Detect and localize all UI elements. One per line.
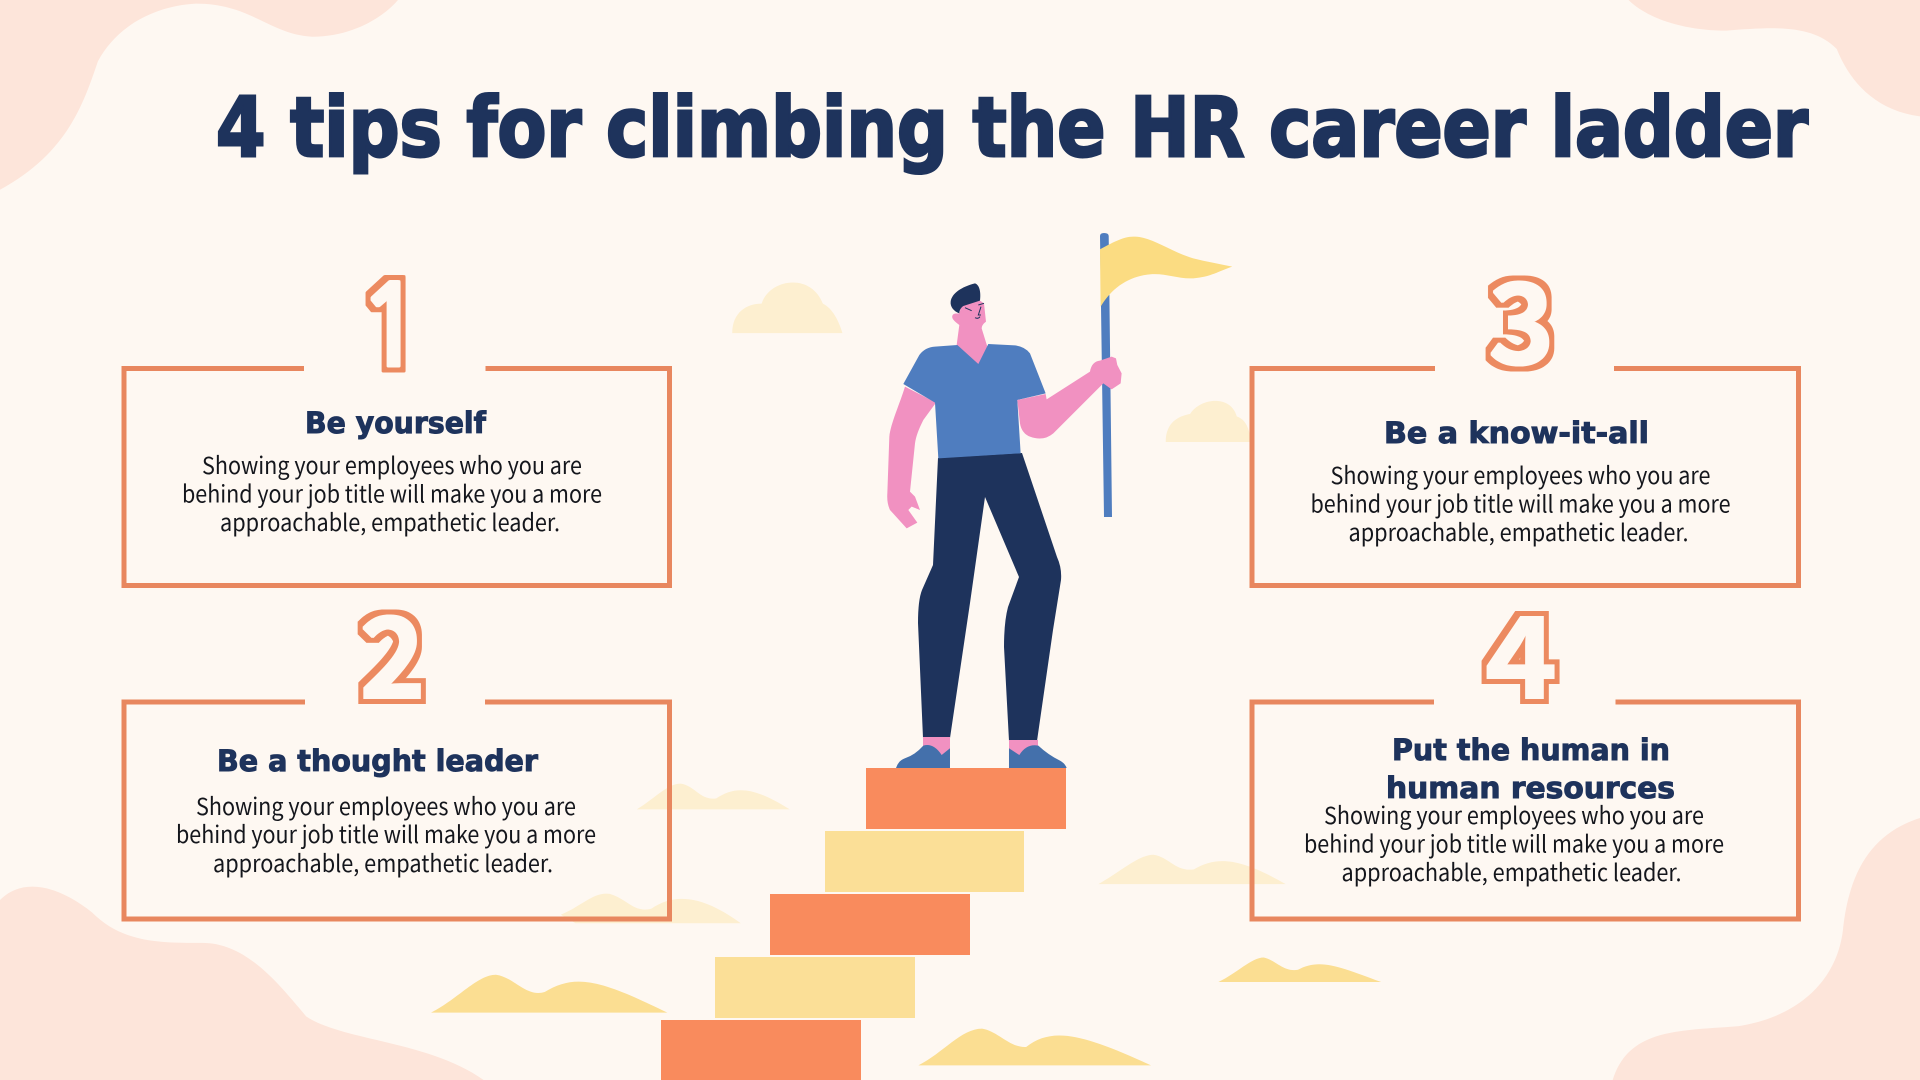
heading: be yourself: Be yourself xyxy=(305,406,486,440)
shoes xyxy=(896,745,1067,768)
number 1: 1 xyxy=(357,272,425,383)
heading: put the human in human resources xyxy=(1386,733,1675,805)
panel: tip 1 xyxy=(124,272,670,586)
body text 3: Showing your employees who you are xyxy=(1330,457,1710,491)
frame 1 xyxy=(124,368,670,586)
frame 3 xyxy=(1252,368,1798,586)
body text 4: behind your job title will make you a more xyxy=(1304,826,1724,860)
body text 1 xyxy=(182,447,602,538)
body text 2: approachable, empathetic leader. xyxy=(213,845,553,879)
body text 1: Showing your employees who you are xyxy=(202,447,582,481)
shirt xyxy=(903,344,1046,458)
number 3: 3 xyxy=(1488,235,1555,397)
number 4: 4 xyxy=(1485,569,1557,731)
right arm and hand xyxy=(1017,357,1122,439)
clouds xyxy=(431,282,1381,1065)
heading: put the human in human resources: Put the human in xyxy=(1392,733,1670,767)
panel: tip 4 xyxy=(1252,569,1798,919)
body text 2 xyxy=(176,788,596,879)
body text 4: Showing your employees who you are xyxy=(1324,797,1704,831)
number 2: 2 xyxy=(359,569,426,731)
body text 4 xyxy=(1304,797,1724,888)
body text 3: approachable, empathetic leader. xyxy=(1348,514,1688,548)
heading: be a thought leader: Be a thought leader xyxy=(217,744,539,778)
body text 3 xyxy=(1310,457,1730,548)
staircase xyxy=(661,768,1066,1080)
panel: tip 3 xyxy=(1252,235,1798,586)
body text 3: behind your job title will make you a more xyxy=(1310,486,1730,520)
body text 2: behind your job title will make you a more xyxy=(176,816,596,850)
body text 1: approachable, empathetic leader. xyxy=(220,504,560,538)
heading: be a know-it-all: Be a know-it-all xyxy=(1384,416,1649,450)
frame 2 xyxy=(124,702,670,919)
frame 4 xyxy=(1252,702,1798,919)
socks xyxy=(923,737,1038,758)
head xyxy=(951,283,987,365)
body text 4: approachable, empathetic leader. xyxy=(1342,854,1682,888)
flag xyxy=(1100,233,1232,517)
body text 2: Showing your employees who you are xyxy=(196,788,576,822)
trousers xyxy=(918,453,1061,741)
left arm xyxy=(887,387,936,528)
heading: put the human in human resources: human resources xyxy=(1386,771,1675,805)
body text 1: behind your job title will make you a more xyxy=(182,476,602,510)
panel: tip 2 xyxy=(124,569,670,919)
person xyxy=(887,283,1122,768)
